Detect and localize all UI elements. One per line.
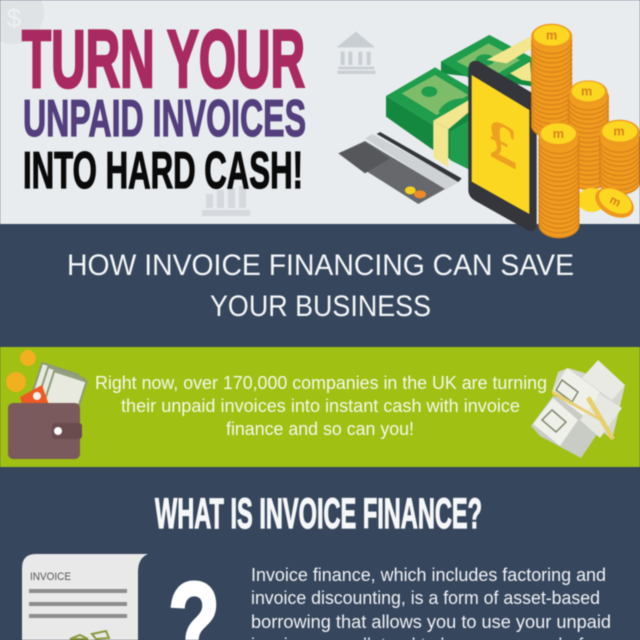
main heading xyxy=(67,249,574,323)
icon: faint dollar coin xyxy=(0,0,44,44)
icon: faint bar chart xyxy=(202,186,250,216)
invoice lines xyxy=(29,589,127,618)
loose coins: m xyxy=(607,192,623,210)
front stack of banknotes xyxy=(386,67,480,170)
coin stack: tall back xyxy=(531,24,572,138)
icon: faint bank xyxy=(337,32,375,74)
phone: £ xyxy=(488,104,517,184)
paper straps xyxy=(433,37,532,167)
main heading: HOW INVOICE FINANCING CAN SAVE xyxy=(67,249,574,282)
back stack of banknotes xyxy=(441,35,533,88)
coin stack: front: m xyxy=(553,127,564,141)
green note below strap xyxy=(450,120,470,170)
icon: faint dollar coin: $ xyxy=(7,3,22,33)
hero background xyxy=(0,0,640,224)
body text: borrowing that allows you to use your unpaid xyxy=(251,612,611,632)
credit card xyxy=(338,132,462,204)
body text: Invoice finance, which includes factoring and xyxy=(251,565,606,585)
banner text xyxy=(95,373,547,439)
banner text: Right now, over 170,000 companies in the UK are turning xyxy=(95,373,547,393)
coin stack: middle xyxy=(568,80,608,189)
body text: invoice discounting, is a form of asset-based xyxy=(251,588,600,608)
title: INTO HARD CASH! xyxy=(23,142,303,200)
coin stack: right xyxy=(599,120,640,194)
title xyxy=(22,14,306,200)
dark section background xyxy=(0,224,640,640)
coin stack: right: m xyxy=(613,125,625,139)
title: UNPAID INVOICES xyxy=(23,90,306,148)
panel: green banner xyxy=(0,347,640,467)
title: TURN YOUR xyxy=(22,14,305,105)
coin stack: front xyxy=(538,122,579,238)
icon: banknote bundles xyxy=(531,360,625,458)
icon: small banknotes xyxy=(70,631,109,639)
coin stack: middle: m xyxy=(581,85,592,99)
icon: wallet with cash xyxy=(6,350,88,459)
invoice document xyxy=(22,554,148,640)
main heading: YOUR BUSINESS xyxy=(210,290,431,323)
body text xyxy=(251,565,611,640)
loose coins xyxy=(578,181,639,224)
hero illustration xyxy=(337,24,640,238)
phone xyxy=(468,61,537,231)
invoice label: INVOICE xyxy=(30,571,71,583)
banner text: their unpaid invoices into instant cash with invoice xyxy=(121,396,520,416)
coin stack: tall back: m xyxy=(546,29,557,43)
banner text: finance and so can you! xyxy=(226,419,414,439)
